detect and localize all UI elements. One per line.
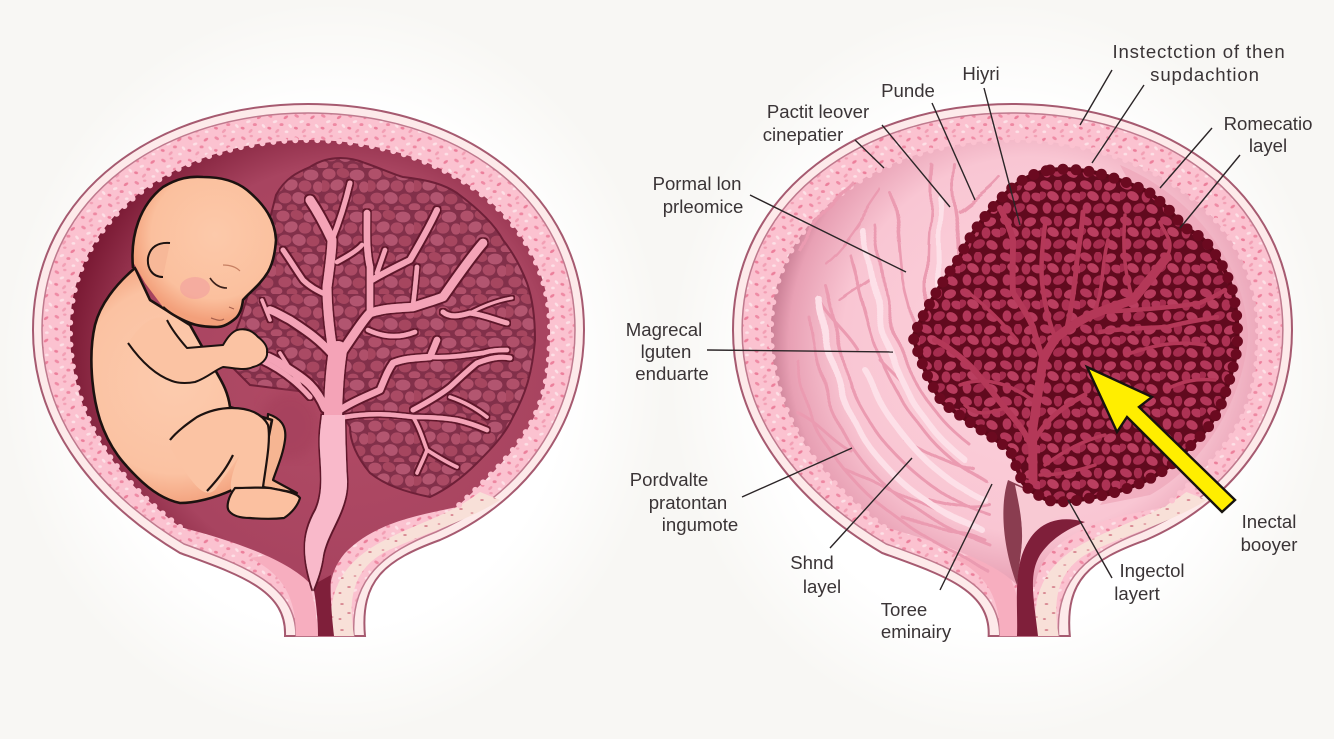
fetus head fill (132, 177, 276, 327)
label: Pormal lon prleomice: Pormal lon (653, 173, 741, 194)
placenta (225, 158, 535, 497)
label: Magrecal lguten enduarte: Magrecal (626, 319, 702, 340)
label: Pormal lon prleomice: prleomice (663, 196, 743, 217)
label: Inectal booyer: Inectal (1242, 511, 1296, 532)
umbilical trunk (305, 415, 347, 590)
fetus (91, 177, 300, 519)
ear (148, 243, 170, 277)
scalloped lining edge (70, 140, 550, 527)
panel: right uterus cross-section (733, 104, 1292, 636)
uterine wall (733, 104, 1292, 636)
label: Pordvalte pratontan ingumote: pratontan (649, 492, 727, 513)
back leg (263, 414, 297, 493)
arm outline (128, 320, 267, 383)
label: Romecatio layel: Romecatio (1224, 113, 1312, 134)
label: Instectction of then supdachtion: supdachtion (1150, 64, 1260, 85)
foot (228, 488, 300, 519)
cervix wall right, cream (331, 492, 500, 636)
thigh outline (170, 408, 269, 491)
label: Romecatio layel: layel (1249, 135, 1287, 156)
cervix left dark strip (1003, 480, 1030, 585)
cervix channel (313, 575, 334, 636)
label: Ingectol layert: layert (1114, 583, 1161, 604)
cervix wall left, pale (250, 552, 318, 636)
uterine wall (33, 104, 584, 636)
brow (223, 265, 240, 271)
label: Magrecal lguten enduarte: lguten (641, 341, 691, 362)
right inner pink rim (1100, 165, 1248, 505)
label: Ingectol layert: Ingectol (1119, 560, 1185, 581)
label: Toree eminairy: Toree (881, 599, 927, 620)
cervix right dark strip (1017, 519, 1085, 636)
arrow: yellow pointer (1087, 367, 1235, 512)
arm and hand (128, 318, 267, 383)
label: Hiyri: Hiyri (962, 63, 1000, 84)
stem pale (1015, 485, 1077, 560)
panel: left uterus with fetus (33, 104, 584, 636)
label: Shnd layel: Shnd (790, 552, 834, 573)
placental branches (935, 208, 1225, 480)
thigh and shin (170, 408, 269, 493)
label: Magrecal lguten enduarte: enduarte (635, 363, 709, 384)
tree branches (260, 183, 512, 473)
leader lines (707, 70, 1240, 590)
scalloped lining edge (771, 140, 1258, 527)
label: Toree eminairy: eminairy (881, 621, 952, 642)
label: Pactit leover cinepatier: Pactit leover (767, 101, 869, 122)
lining folds (795, 165, 1000, 568)
placenta (913, 169, 1238, 502)
faded lower placenta (260, 391, 320, 459)
lining highlights (820, 200, 985, 530)
mouth (211, 307, 234, 320)
fetus head outline (132, 177, 276, 327)
label: Instectction of then supdachtion: Instectction of then (1112, 41, 1286, 62)
label: Shnd layel: layel (803, 576, 841, 597)
label: Pordvalte pratontan ingumote: ingumote (662, 514, 738, 535)
endometrial lining (771, 140, 1258, 587)
label: Punde: Punde (881, 80, 935, 101)
uterine cavity (70, 140, 550, 587)
fetus body (91, 268, 272, 503)
label: Pactit leover cinepatier: cinepatier (763, 124, 843, 145)
label: Inectal booyer: booyer (1241, 534, 1297, 555)
cheek (180, 277, 210, 299)
umbilical tree (260, 183, 512, 590)
closed eye (210, 278, 227, 288)
label: Pordvalte pratontan ingumote: Pordvalte (630, 469, 708, 490)
